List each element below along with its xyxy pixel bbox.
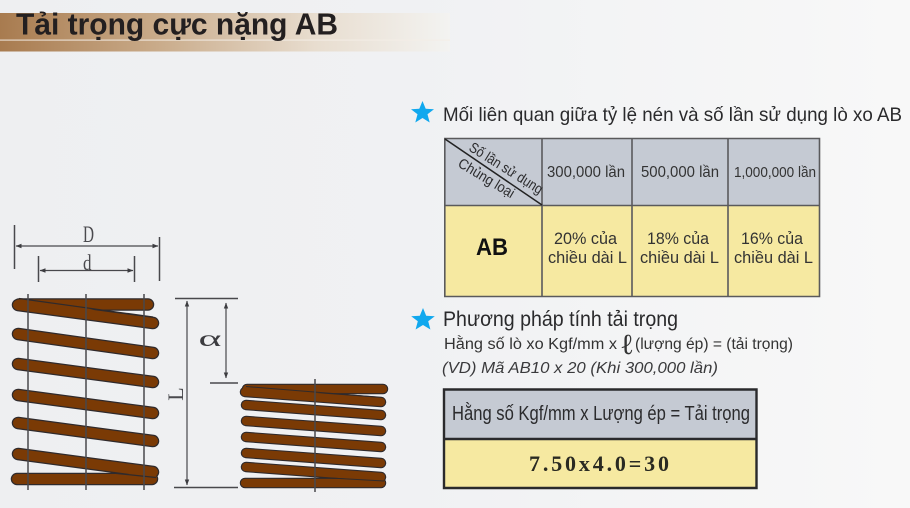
title banner: [0, 6, 450, 52]
column headers: 300,000 lần: [547, 164, 625, 181]
section heading: compression vs cycles: [411, 101, 902, 126]
dimension D: D: [83, 222, 94, 247]
section heading: load calculation: [411, 308, 678, 331]
column headers: 500,000 lần: [641, 164, 719, 181]
dimension L and compression alpha: [163, 298, 238, 488]
column headers: 1,000,000 lần: [734, 164, 816, 181]
free spring coils: [17, 294, 156, 490]
dimension alpha: [199, 303, 226, 378]
dimension L: L: [163, 387, 188, 401]
formula heading: Hằng số Kgf/mm x Lượng ép = Tải trọng: [452, 402, 750, 425]
diagram: compressed spring: [245, 379, 384, 492]
formula result: 7.50x4.0=30: [529, 451, 669, 476]
icon: blue star: [411, 308, 435, 330]
dimension d: d: [83, 250, 92, 275]
formula text: [444, 329, 793, 361]
formula text: ℓ: [620, 329, 634, 361]
table: compression ratio by number of cycles: [445, 138, 820, 297]
values: 18% của: [647, 229, 709, 248]
formula text: (lượng ép) = (tải trọng): [635, 336, 793, 353]
dimension alpha: α: [199, 326, 221, 351]
dimension d: [38, 250, 134, 282]
diagram: free spring with dimensions D and d: [14, 222, 160, 490]
dimension D: [14, 222, 160, 281]
column headers: [547, 164, 816, 181]
title: Tải trọng cực nặng AB: [16, 6, 338, 42]
formula text: Hằng số lò xo Kgf/mm x: [444, 336, 617, 353]
diagonal header labels: Số lần sử dụng: [466, 140, 546, 198]
values: chiều dài L: [548, 249, 627, 267]
values: chiều dài L: [640, 249, 719, 267]
values: [548, 229, 813, 267]
row label: AB: [476, 234, 508, 261]
values: 16% của: [741, 229, 803, 248]
heading text: Phương pháp tính tải trọng: [443, 308, 678, 331]
icon: blue star: [411, 101, 434, 122]
values: 20% của: [554, 229, 618, 248]
values: chiều dài L: [734, 249, 813, 267]
diagonal header labels: Chủng loại: [455, 156, 517, 202]
calculation box: [444, 390, 756, 488]
heading text: Mối liên quan giữa tỷ lệ nén và số lần sử dụng lò xo AB: [443, 104, 902, 126]
example text: (VD) Mã AB10 x 20 (Khi 300,000 lần): [442, 360, 718, 377]
